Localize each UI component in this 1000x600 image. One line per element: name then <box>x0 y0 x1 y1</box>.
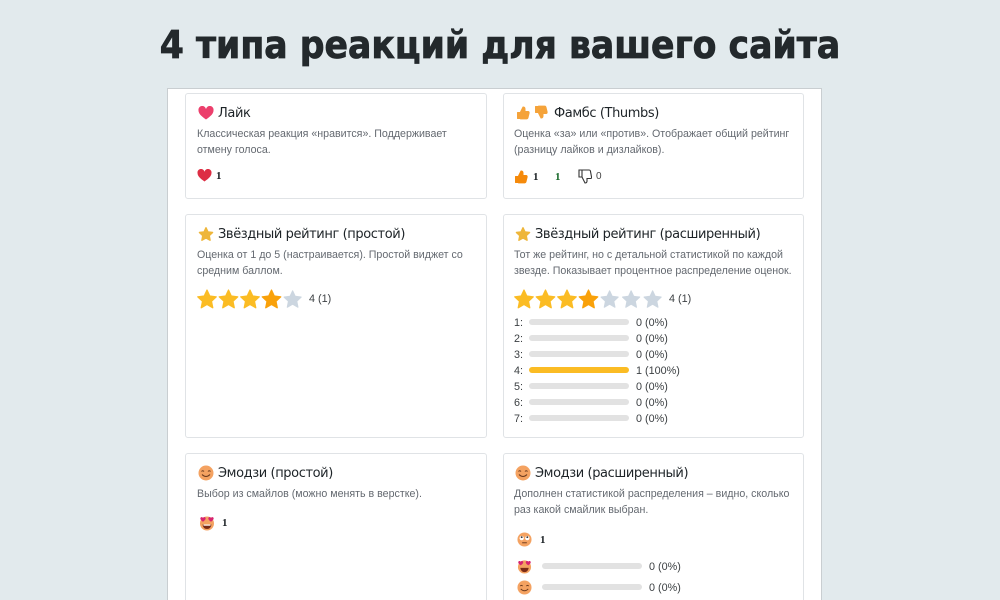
row 3: 0 (0%) <box>636 349 668 361</box>
description: emoji simple: Выбор из смайлов (можно менять в верстке). <box>197 488 422 500</box>
white page panel <box>168 89 821 600</box>
rating value: 4 (1) <box>309 293 331 305</box>
heading: emoji extended: Эмодзи (расширенный) <box>535 466 688 481</box>
rating stars <box>197 289 302 308</box>
heading: thumbs: Фамбс (Thumbs) <box>554 106 659 121</box>
panel: emoji simple <box>185 453 487 600</box>
description: thumbs: Оценка «за» или «против». Отображает общий рейтинг <box>514 128 789 140</box>
heading: like: Лайк <box>218 106 250 121</box>
thumbs down count: 0 <box>596 171 602 182</box>
row 2 <box>514 333 668 345</box>
row 1: 0 (0%) <box>636 317 668 329</box>
distribution row: smile <box>518 580 681 594</box>
icon: thumbs up button <box>515 170 528 184</box>
bar <box>542 584 642 590</box>
icon: heart eyes <box>518 560 532 574</box>
value: 0 (0%) <box>649 582 681 594</box>
description: star extended: Тот же рейтинг, но с детальной статистикой по каждой <box>514 249 783 261</box>
title: 4 типа реакций для вашего сайта <box>160 23 840 67</box>
description: star simple: средним баллом. <box>197 265 283 277</box>
description: star extended <box>514 249 792 277</box>
icon: thumbs up heading <box>517 106 530 120</box>
description: emoji extended: раз какой смайлик выбран. <box>514 504 648 516</box>
row 7: 7: <box>514 413 523 425</box>
description: like: отмену голоса. <box>197 144 271 156</box>
heading: star simple: Звёздный рейтинг (простой) <box>218 227 405 242</box>
row 7 <box>514 413 668 425</box>
description: star simple <box>197 249 463 277</box>
value: 0 (0%) <box>649 561 681 573</box>
icon: thumbs down heading <box>535 106 548 118</box>
icon: heart eyes <box>200 516 214 530</box>
description: emoji extended <box>514 488 789 516</box>
thumbs up count: 1 <box>533 171 538 183</box>
description: thumbs <box>514 128 789 156</box>
row 1 <box>514 317 668 329</box>
row 1: 1: <box>514 317 523 329</box>
description: like: Классическая реакция «нравится». Поддерживает <box>197 128 447 140</box>
panel: star rating extended <box>503 214 804 438</box>
row 4: 4: <box>514 365 523 377</box>
row 2: 2: <box>514 333 523 345</box>
row 3: 3: <box>514 349 523 361</box>
row 6 <box>514 397 668 409</box>
row 6: 6: <box>514 397 523 409</box>
distribution row: heart eyes <box>518 560 681 574</box>
icon: smile heading <box>516 466 530 480</box>
icon: star heading <box>516 227 530 241</box>
description: like <box>197 128 447 156</box>
icon: rolling eyes <box>518 532 532 546</box>
icon: smile heading <box>198 466 214 480</box>
rating value: 4 (1) <box>669 293 691 305</box>
description: star simple: Оценка от 1 до 5 (настраивается). Простой виджет со <box>197 249 463 261</box>
rating stars <box>514 289 662 308</box>
row 3 <box>514 349 668 361</box>
icon: heart button <box>197 169 212 182</box>
heading: emoji simple: Эмодзи (простой) <box>218 466 333 481</box>
icon: heart heading <box>198 106 214 120</box>
panel: emoji extended <box>503 453 804 600</box>
description: star extended: звезде. Показывает процентное распределение оценок. <box>514 265 792 277</box>
description: thumbs: (разницу лайков и дизлайков). <box>514 144 664 156</box>
panel: like <box>185 93 487 199</box>
row 4 <box>514 365 680 377</box>
icon: thumbs down outline <box>578 170 592 184</box>
row 5: 0 (0%) <box>636 381 668 393</box>
row 6: 0 (0%) <box>636 397 668 409</box>
row 4: 1 (100%) <box>636 365 680 377</box>
panel: thumbs <box>503 93 804 199</box>
row 7: 0 (0%) <box>636 413 668 425</box>
thumbs total: 1 <box>555 171 560 183</box>
emoji count: 1 <box>540 534 546 546</box>
row 5: 5: <box>514 381 523 393</box>
row 5 <box>514 381 668 393</box>
like count: 1 <box>216 170 222 182</box>
icon: star heading <box>198 227 214 241</box>
emoji count: 1 <box>222 517 228 529</box>
distribution chart <box>514 317 680 425</box>
icon: smile <box>518 580 532 594</box>
heading: star extended: Звёздный рейтинг (расширенный) <box>535 227 760 242</box>
row 2: 0 (0%) <box>636 333 668 345</box>
bar <box>542 563 642 569</box>
description: emoji extended: Дополнен статистикой распределения – видно, сколько <box>514 488 789 500</box>
panel: star rating simple <box>185 214 487 438</box>
